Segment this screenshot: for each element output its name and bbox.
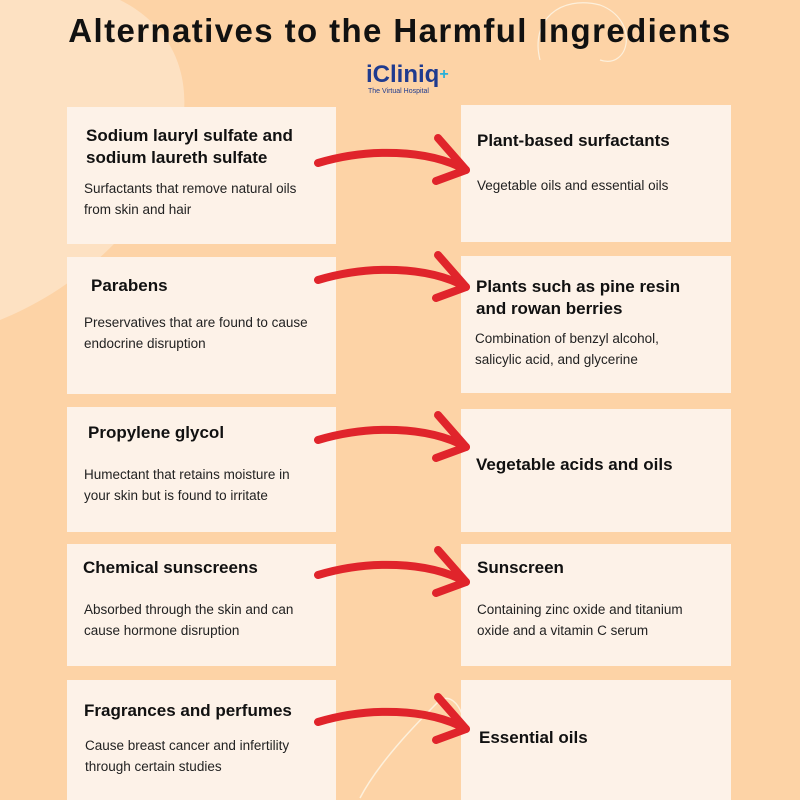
panel: row3 right: Vegetable acids and oils: [476, 455, 673, 474]
panel: row5 left: Cause breast cancer and infertility: [85, 738, 289, 753]
panel: row2 left: Preservatives that are found to cause: [84, 315, 308, 330]
panel: row3 left: Humectant that retains moisture in: [84, 467, 290, 482]
arrow 1: [318, 138, 466, 181]
panel: row5 left: through certain studies: [85, 759, 222, 774]
panel: row4 left: Absorbed through the skin and can: [84, 602, 293, 617]
panel: row1 left: Sodium lauryl sulfate and: [86, 126, 293, 145]
panel: row1 left: [67, 107, 336, 244]
logo: The Virtual Hospital: [368, 88, 429, 95]
panel: row2 right: and rowan berries: [476, 299, 622, 318]
panel: row2 right: [461, 256, 731, 393]
panel: row1 right: Vegetable oils and essential oils: [477, 178, 668, 193]
arrow 2: [318, 255, 466, 298]
panel: row2 right: salicylic acid, and glycerine: [475, 352, 638, 367]
title: Alternatives to the Harmful Ingredients: [68, 12, 732, 49]
panel: row4 right: oxide and a vitamin C serum: [477, 623, 648, 638]
arrow 5: [318, 697, 466, 740]
panel: row5 right: Essential oils: [479, 728, 588, 747]
panel: row4 right: Sunscreen: [477, 558, 564, 577]
panel: row1 right: Plant-based surfactants: [477, 131, 670, 150]
logo: iCliniq+: [366, 61, 449, 88]
panel: row2 left: Parabens: [91, 276, 168, 295]
panel: row3 left: your skin but is found to irritate: [84, 488, 268, 503]
panel: row3 left: [67, 407, 336, 532]
panel: row4 left: [67, 544, 336, 666]
panel: row5 right: [461, 680, 731, 800]
panel: row5 left: [67, 680, 336, 800]
panel: row1 left: Surfactants that remove natural oils: [84, 181, 296, 196]
panel: row4 right: Containing zinc oxide and titanium: [477, 602, 683, 617]
panel: row2 left: endocrine disruption: [84, 336, 206, 351]
arrow 3: [318, 415, 466, 458]
panel: row2 right: Combination of benzyl alcohol,: [475, 331, 659, 346]
panel: row1 left: from skin and hair: [84, 202, 191, 217]
arrow 4: [318, 550, 466, 593]
panel: row5 left: Fragrances and perfumes: [84, 701, 292, 720]
panel: row4 left: Chemical sunscreens: [83, 558, 258, 577]
panel: row3 left: Propylene glycol: [88, 423, 224, 442]
panel: row1 left: sodium laureth sulfate: [86, 148, 267, 167]
panel: row1 right: [461, 105, 731, 242]
panel: row4 left: cause hormone disruption: [84, 623, 239, 638]
panel: row2 right: Plants such as pine resin: [476, 277, 680, 296]
panel: row4 right: [461, 544, 731, 666]
panel: row3 right: [461, 409, 731, 532]
panel: row2 left: [67, 257, 336, 394]
